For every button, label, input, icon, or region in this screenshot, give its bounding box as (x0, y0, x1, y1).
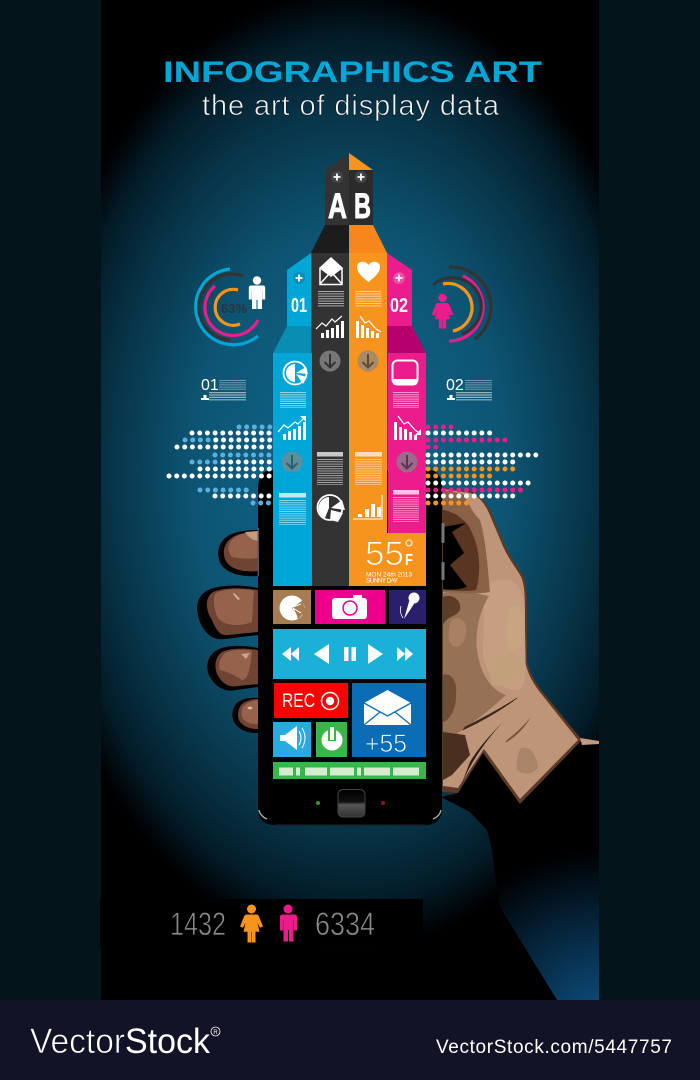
footer logo: R (213, 1030, 218, 1036)
weather reading: F (405, 552, 413, 569)
tile: media controls (273, 629, 426, 679)
weather reading: SUNNY DAY (366, 578, 399, 584)
tile: power (316, 722, 347, 757)
tile: pie chart (273, 590, 311, 624)
tile: record (274, 683, 348, 718)
left gauge: 63% (221, 301, 247, 316)
home button (338, 790, 365, 817)
hand: finger 2 (197, 586, 258, 639)
title: INFOGRAPHICS ART (163, 56, 542, 89)
text block: orange column 2 (355, 452, 382, 485)
dot map: right (428, 427, 538, 503)
left gauge (196, 269, 258, 345)
icon: pink male (280, 904, 297, 942)
letter A: A (328, 187, 347, 226)
icon: orange female (240, 904, 263, 942)
sleeve upper (441, 740, 599, 830)
label 01: 01 (201, 377, 219, 394)
tile: camera (315, 590, 385, 624)
column: blue (273, 253, 312, 586)
text block: dark column 2 (317, 452, 343, 485)
stats bar: 6334 (315, 906, 375, 942)
weather reading (365, 535, 413, 584)
tile: green status bar (273, 762, 426, 779)
hand: finger 1 (218, 530, 258, 576)
icon: down arrow dark column (320, 350, 340, 372)
led: red (381, 801, 385, 805)
stats bar (100, 899, 423, 947)
icon: down arrow pink column (396, 452, 418, 472)
footer logo: Vector (30, 1022, 125, 1061)
column: blue: 01 (291, 295, 307, 317)
column: pink: 02 (390, 295, 408, 317)
tile: mail count: +55 (365, 730, 407, 758)
icon: male figure (249, 276, 265, 309)
tile: mail count (352, 683, 426, 758)
label 01 (201, 377, 232, 401)
hand: finger 3 (207, 646, 258, 691)
led: green (316, 801, 320, 805)
hand: finger 4 (232, 698, 258, 733)
icon: envelope (319, 257, 343, 284)
text block: pink column 1 (393, 392, 419, 408)
icon: down arrow orange column (358, 350, 378, 372)
footer logo (30, 1022, 220, 1061)
plus badge B (355, 171, 367, 183)
column: dark (312, 253, 349, 586)
text block: dark column 1 (318, 291, 344, 307)
footer band (0, 1000, 700, 1080)
icon: pie chart blue column (284, 362, 308, 384)
icon: rising chart blue column (278, 416, 306, 440)
plus badge A (331, 171, 343, 183)
icon: falling chart orange column (356, 316, 381, 338)
right gauge (433, 267, 491, 341)
icon: tv pink column (392, 360, 418, 385)
rocket: nose (311, 153, 387, 253)
label 02: 02 (446, 377, 464, 394)
dot map: left (169, 427, 272, 503)
weather reading: 55 (365, 535, 404, 573)
icon: female figure (432, 294, 453, 328)
icon: falling chart pink column (394, 416, 421, 440)
footer logo: Stock (125, 1022, 210, 1061)
hand: back of hand (440, 487, 599, 804)
subtitle: the art of display data (202, 90, 500, 122)
icon: pie chart dark column (318, 495, 345, 522)
text block: blue column 1 (280, 392, 306, 408)
tile: record: REC (282, 691, 315, 712)
tile: microphone (389, 590, 426, 624)
column: orange (349, 253, 426, 586)
text block: blue column 2 (279, 493, 306, 525)
icon: heart (357, 262, 380, 282)
text block: pink column 2 (393, 490, 419, 522)
sleeve lower (480, 760, 599, 1000)
footer url: VectorStock.com/5447757 (436, 1037, 672, 1058)
icon: down arrow blue column (282, 452, 302, 472)
icon: bar chart orange column (353, 495, 382, 519)
label 02 (446, 377, 478, 401)
stats bar: 1432 (170, 906, 226, 942)
tile: speaker (273, 722, 311, 757)
text block: orange column 1 (356, 291, 382, 307)
letter B: B (354, 187, 371, 226)
column: pink (387, 253, 426, 533)
phone body (258, 470, 444, 825)
weather reading: MON 24th 2013 (366, 572, 412, 578)
icon: rising chart dark column (316, 316, 344, 338)
